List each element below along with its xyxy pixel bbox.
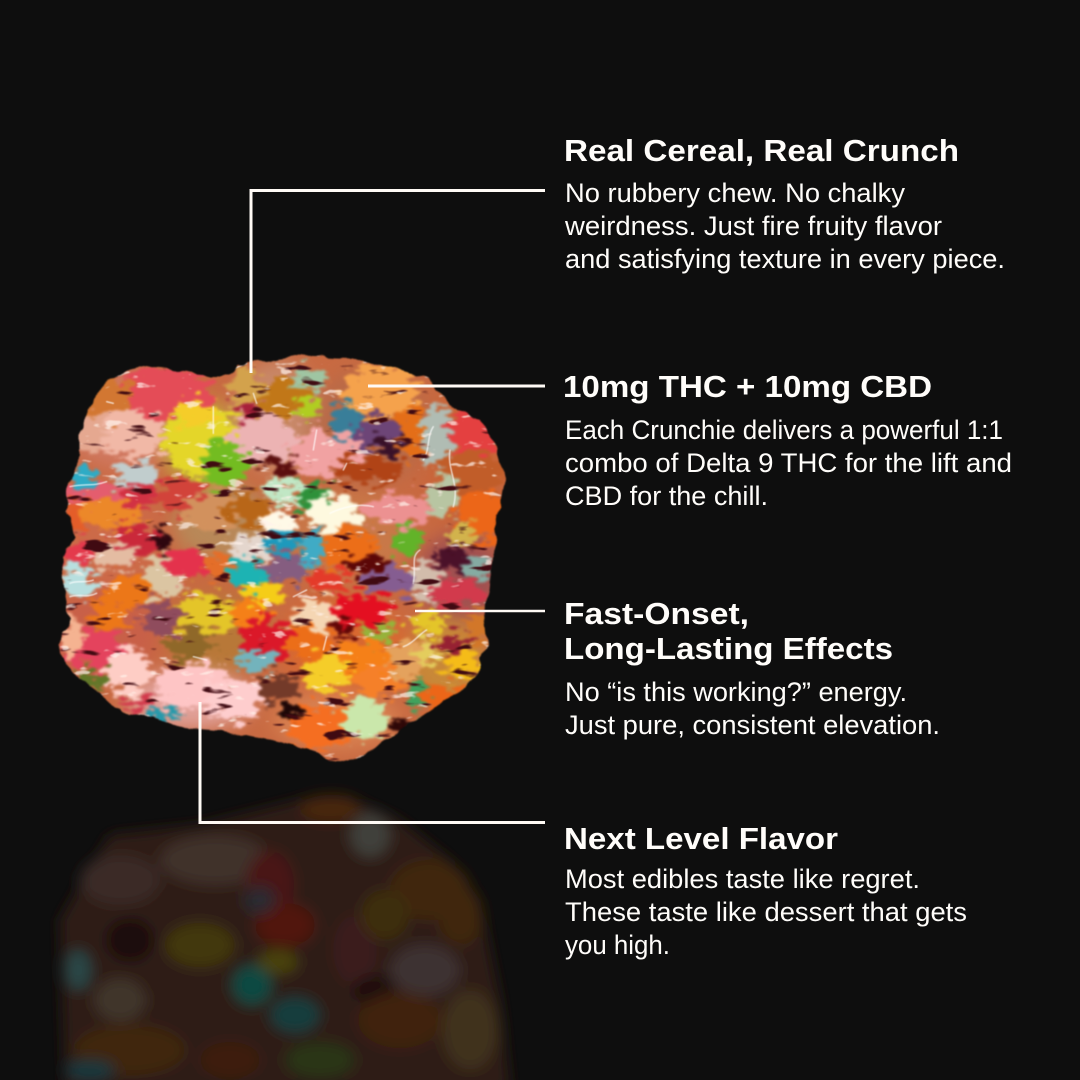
body — [565, 677, 940, 740]
text block: thc and cbd — [563, 369, 1012, 511]
body: combo of Delta 9 THC for the lift and — [565, 448, 1012, 478]
heading: 10mg THC + 10mg CBD — [563, 369, 932, 404]
body: These taste like dessert that gets — [565, 897, 967, 927]
marbled colour patches — [57, 363, 508, 750]
body: Just pure, consistent elevation. — [565, 710, 940, 740]
heading: Real Cereal, Real Crunch — [564, 133, 959, 168]
leader line: effects — [415, 610, 545, 612]
crunchie cereal treat — [58, 353, 507, 762]
body — [565, 864, 967, 960]
body: and satisfying texture in every piece. — [565, 244, 1005, 274]
heading: Long-Lasting Effects — [564, 631, 893, 666]
leader line: thc and cbd — [368, 384, 545, 388]
body: CBD for the chill. — [565, 481, 768, 511]
heading: Fast-Onset, — [564, 596, 749, 631]
glossy highlights — [70, 363, 455, 660]
text block: fast-onset — [564, 596, 940, 740]
heading: Next Level Flavor — [564, 821, 838, 856]
leader line: flavor — [200, 702, 545, 822]
body: you high. — [565, 930, 670, 960]
body: No rubbery chew. No chalky — [565, 178, 906, 208]
text block: real cereal, real crunch — [564, 133, 1005, 274]
heading — [564, 596, 893, 666]
text block: next level flavor — [564, 821, 967, 960]
body: Each Crunchie delivers a powerful 1:1 — [565, 415, 1003, 445]
body: weirdness. Just fire fruity flavor — [564, 211, 942, 241]
leader line: real cereal — [251, 190, 545, 373]
regional colour wash — [47, 360, 510, 750]
body: No “is this working?” energy. — [565, 677, 907, 707]
blurred reflection of the crunchie — [60, 795, 510, 1080]
body: Most edibles taste like regret. — [565, 864, 920, 894]
body — [565, 415, 1012, 511]
body — [564, 178, 1005, 274]
